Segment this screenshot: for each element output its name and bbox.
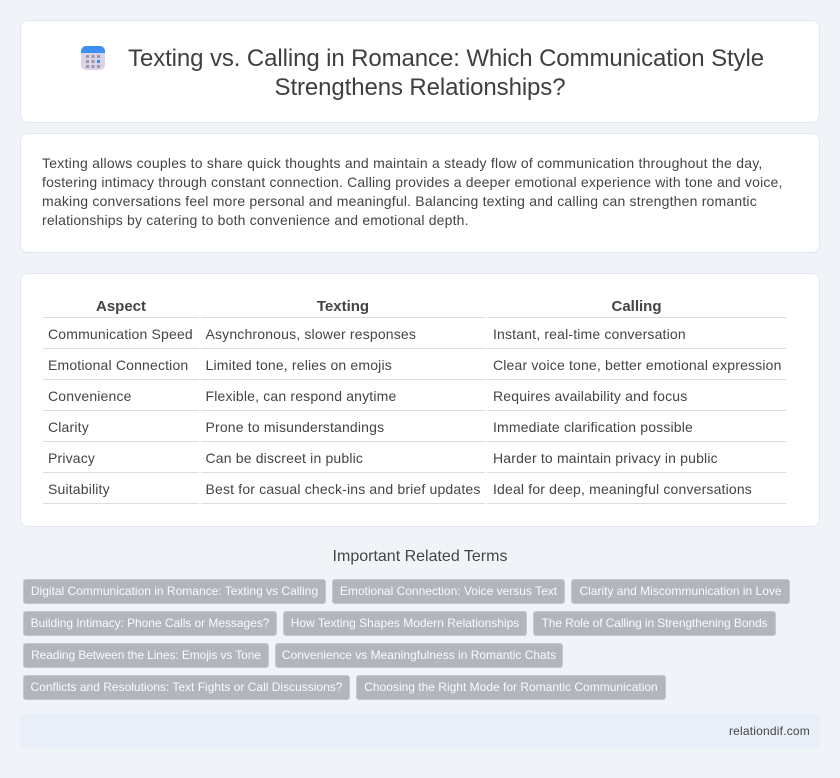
column heading: Aspect: Aspect [96, 298, 146, 315]
related terms tags: Emotional Connection: Voice versus Text [340, 584, 557, 598]
column heading: Texting: Texting [317, 298, 369, 315]
table rows: Limited tone, relies on emojis [206, 357, 392, 373]
intro text: Texting allows couples to share quick thoughts and maintain a steady flow of communication throughout the day, [42, 155, 763, 171]
table rows: Convenience [48, 388, 132, 404]
intro panel [20, 133, 820, 253]
related terms heading: Important Related Terms [333, 548, 507, 565]
related terms tags: The Role of Calling in Strengthening Bonds [542, 616, 767, 630]
title [128, 45, 764, 101]
title: Strengthens Relationships? [275, 74, 565, 101]
table rows: Emotional Connection [48, 357, 188, 373]
intro text: making conversations feel more personal and meaningful. Balancing texting and calling can strengthen romantic [42, 193, 757, 209]
table rows: Flexible, can respond anytime [206, 388, 396, 404]
table rows: Ideal for deep, meaningful conversations [493, 481, 752, 497]
related terms tags: Clarity and Miscommunication in Love [579, 584, 782, 598]
table rows: Communication Speed [48, 326, 193, 342]
related terms tags: Digital Communication in Romance: Texting vs Calling [31, 584, 318, 598]
intro text [42, 155, 783, 228]
table rows: Best for casual check-ins and brief updates [206, 481, 481, 497]
table rows: Immediate clarification possible [493, 419, 693, 435]
icon: calendar app [81, 46, 105, 70]
related terms tags: Building Intimacy: Phone Calls or Messages? [31, 616, 269, 630]
related terms tags: Reading Between the Lines: Emojis vs Tone [31, 648, 261, 662]
related terms tags: How Texting Shapes Modern Relationships [291, 616, 519, 630]
table rows: Requires availability and focus [493, 388, 687, 404]
column heading: Calling: Calling [611, 298, 662, 315]
intro text: fostering intimacy through constant connection. Calling provides a deeper emotional experience with tone and voice, [42, 174, 783, 190]
table rows: Privacy [48, 450, 95, 466]
table rows: Asynchronous, slower responses [206, 326, 416, 342]
related terms tags: Choosing the Right Mode for Romantic Communication [364, 680, 658, 694]
table rows: Harder to maintain privacy in public [493, 450, 718, 466]
header card [20, 20, 820, 123]
table rows: Suitability [48, 481, 110, 497]
table rows [43, 317, 786, 504]
footer source text: relationdif.com [729, 724, 810, 738]
comparison table panel [20, 273, 820, 527]
table rows: Clear voice tone, better emotional expression [493, 357, 782, 373]
footer bar [20, 714, 820, 748]
intro text: relationships by catering to both convenience and emotional depth. [42, 212, 469, 228]
table rows: Can be discreet in public [206, 450, 363, 466]
table rows: Prone to misunderstandings [206, 419, 384, 435]
related terms tags: Conflicts and Resolutions: Text Fights or Call Discussions? [31, 680, 342, 694]
related terms tags: Convenience vs Meaningfulness in Romantic Chats [282, 648, 556, 662]
title: Texting vs. Calling in Romance: Which Communication Style [128, 45, 764, 72]
table rows: Instant, real-time conversation [493, 326, 686, 342]
table rows: Clarity [48, 419, 89, 435]
